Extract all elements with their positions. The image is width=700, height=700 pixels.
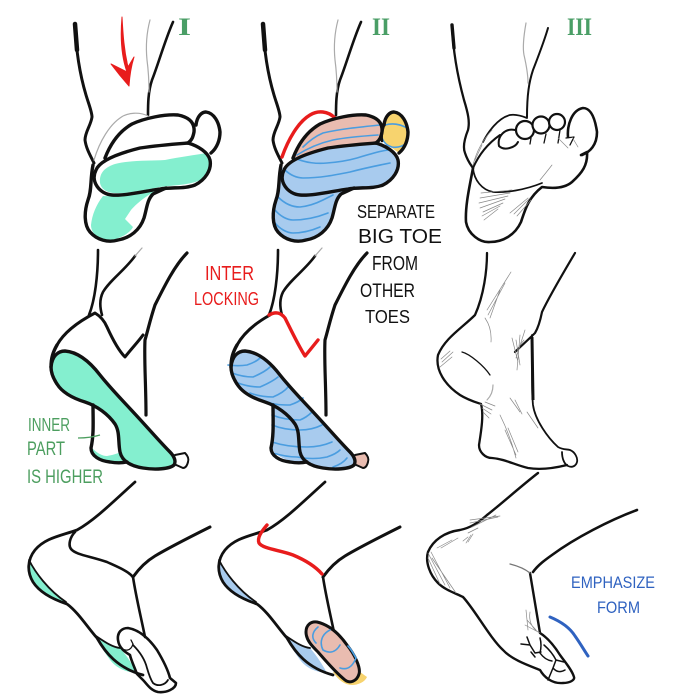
salmon toes [306,622,359,682]
panel: row 2 step III finished drawing [437,253,577,469]
callout: emphasize form: FORM [597,598,640,617]
foot outline [427,473,637,683]
foot outlines [29,482,210,675]
callout: inner part is higher: IS HIGHER [27,467,103,488]
panel: row 3 step II [219,482,400,685]
leg outlines [75,20,173,163]
yellow big toe tip [333,672,367,685]
panel: row 3 step III finished drawing [427,473,655,683]
panel: row 1 step III finished drawing [452,14,597,242]
callout: separate big toe note: TOES [365,307,410,327]
teal side fill: heel [29,560,66,602]
callout: inter locking: LOCKING [194,289,259,309]
toes outline [118,628,176,692]
callout: emphasize form [571,573,655,617]
leg outlines [452,23,548,168]
contour stripes [275,124,407,233]
numeral I: I [178,14,191,41]
callout: inter locking: INTER [205,263,254,285]
leg and foot outlines [231,248,368,469]
callout: inter locking [194,263,259,309]
blue sole fill [273,143,398,241]
callout: separate big toe note: SEPARATE [357,202,435,222]
shading hatches [473,130,578,220]
foot block outlines [273,112,408,241]
teal sole fill: ball [100,153,209,193]
teal sole fill [51,351,175,469]
red interlocking line [258,525,322,574]
toe details [521,637,565,680]
teal inner arch [92,448,124,462]
callout: separate big toe note: OTHER [360,281,415,302]
callout: inner part is higher: INNER [28,415,70,435]
yellow big toe [382,112,408,153]
red interlocking arc [282,112,335,157]
foot outline [437,253,577,469]
callout: separate big toe note [357,202,442,327]
icon: blue form curve [550,617,588,656]
leg and foot outlines [51,248,188,469]
salmon toe tip [354,453,368,468]
leg outlines [263,20,361,163]
panel: row 3 step I [29,482,210,692]
teal side fill: ball [96,636,137,673]
callout: inner part is higher [27,415,103,488]
contour stripes [228,358,347,467]
shading hatches [428,515,540,633]
panel: row 2 step II [194,248,368,469]
foot outlines [219,482,400,675]
panel: row 1 step I [75,14,220,241]
salmon toes pad [293,115,382,158]
toes [499,114,565,149]
numeral III: III [567,14,592,41]
red interlocking line [269,313,318,356]
callout: emphasize form: EMPHASIZE [571,573,655,592]
blue side fill [219,560,327,673]
foot block outlines [85,112,220,241]
blue sole fill [231,351,355,469]
contour arcs on toes [313,627,356,669]
teal sole fill: heel [91,189,160,240]
icon: red downward arrow [111,17,134,86]
callout: inner part is higher: PART [27,439,65,460]
callout: separate big toe note: BIG TOE [358,226,442,248]
panel: row 1 step II [263,14,408,241]
numeral II: II [372,14,390,41]
foot sole outline [466,108,597,242]
callout: separate big toe note: FROM [372,253,418,275]
shading hatches [440,272,538,458]
panel: row 2 step I [27,248,188,488]
